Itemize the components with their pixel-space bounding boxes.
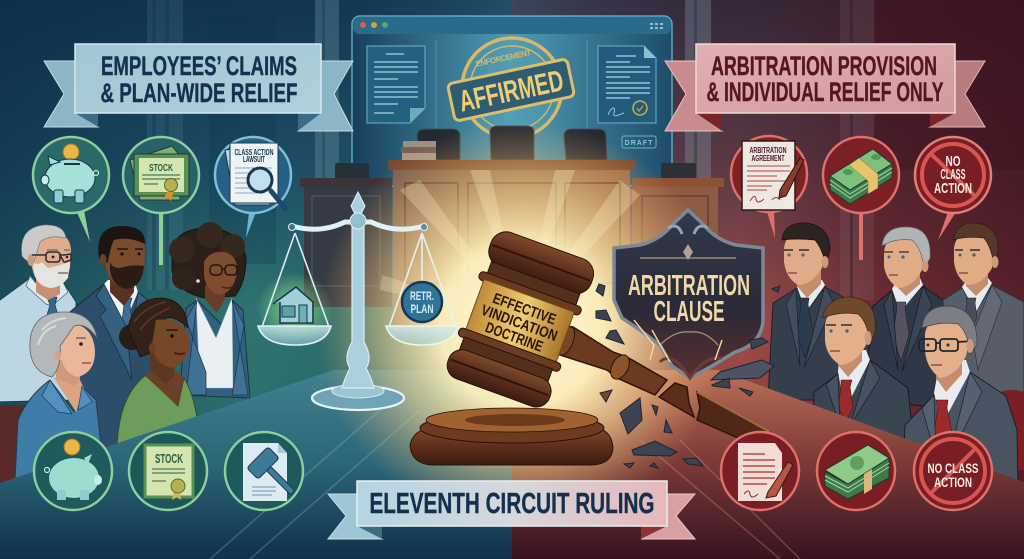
screen document right xyxy=(598,46,656,123)
employee: woman with grey hair xyxy=(14,312,106,500)
stamp: affirmed xyxy=(444,38,575,138)
banner: eleventh circuit ruling xyxy=(328,481,695,539)
icon bubble: stock certificate top: STOCK xyxy=(149,163,174,174)
icon: retirement plan badge: PLAN xyxy=(410,302,434,316)
icon bubble: arbitration agreement: AGREEMENT xyxy=(752,154,785,163)
stamp: affirmed: AFFIRMED xyxy=(456,64,567,119)
gavel band text: VINDICATION xyxy=(479,302,560,345)
shattered arbitration clause shield xyxy=(614,210,763,378)
balance scales xyxy=(257,192,458,410)
books xyxy=(401,141,436,160)
banner: employees' claims: & PLAN-WIDE RELIEF xyxy=(100,78,298,108)
icon bubble: piggy bank top xyxy=(33,137,109,242)
employee: older man with glasses xyxy=(0,225,78,402)
icon badge: cash stack bottom xyxy=(817,432,895,510)
banner: arbitration provision xyxy=(665,44,985,131)
icon bubble: arbitration agreement: ARBITRATION xyxy=(750,146,787,155)
icon badge: piggy bank bottom xyxy=(34,432,112,510)
red chair xyxy=(1000,390,1024,470)
icon badge: no class action bottom xyxy=(914,432,992,510)
icon bubble: no class action xyxy=(915,137,991,240)
icon badge: stock certificate bottom xyxy=(129,432,207,510)
scale base and post xyxy=(312,192,404,410)
icon badge: gavel document xyxy=(225,432,303,510)
icon bubble: stock certificate top xyxy=(123,137,199,265)
icon bubble: cash stack top xyxy=(823,137,899,260)
employee: man in blue suit xyxy=(70,226,166,452)
icon bubble: no class action: NO xyxy=(946,153,961,170)
table xyxy=(0,370,1024,559)
shield shards xyxy=(596,284,780,468)
banner: employees' claims xyxy=(44,44,353,131)
icon badge: no class action bottom: ACTION xyxy=(934,474,972,490)
judges' bench with chairs and books xyxy=(300,126,724,329)
right pan with retirement plan xyxy=(386,233,458,345)
sound block xyxy=(410,408,613,465)
gavel handle broken part xyxy=(659,383,770,441)
icon: retirement plan badge xyxy=(402,282,442,322)
shield title: CLAUSE xyxy=(654,296,724,328)
chairs xyxy=(417,126,607,160)
gavel handle upper part xyxy=(554,324,667,395)
icon bubble: no class action: ACTION xyxy=(934,180,972,197)
gavel xyxy=(443,227,770,441)
gavel head xyxy=(443,227,598,411)
shield title: ARBITRATION xyxy=(628,270,750,302)
icon bubble: no class action: CLASS xyxy=(940,166,966,183)
icon bubble: class action lawsuit: CLASS ACTION xyxy=(234,148,274,157)
icon bubble: arbitration agreement xyxy=(731,136,807,238)
banner: employees' claims: EMPLOYEES’ CLAIMS xyxy=(101,51,297,81)
gavel band text: EFFECTIVE xyxy=(490,290,558,329)
employee: woman with curly hair xyxy=(169,222,250,398)
attorney: brown hair right xyxy=(943,223,1024,420)
left pan with house xyxy=(257,233,333,348)
chair behind woman xyxy=(0,405,30,485)
icon badge: stock certificate bottom: STOCK xyxy=(155,451,183,466)
screen: affirmed decision display xyxy=(352,16,672,186)
screen document left xyxy=(367,46,425,123)
stamp: affirmed: ENFORCEMENT xyxy=(475,48,534,69)
button: draft xyxy=(622,136,656,148)
gavel band text xyxy=(474,288,565,359)
gavel band text: DOCTRINE xyxy=(483,319,545,356)
attorney: top left xyxy=(768,223,870,400)
left group: employees xyxy=(0,222,250,500)
central light burst xyxy=(317,120,727,530)
icon bubble: class action lawsuit xyxy=(215,137,291,238)
attorney: grey haired xyxy=(865,227,962,410)
right group: attorneys xyxy=(768,223,1024,495)
attorney: front with red tie xyxy=(812,297,914,450)
icon badge: no class action bottom: NO CLASS xyxy=(928,460,978,476)
shield title xyxy=(628,270,750,328)
banner: eleventh circuit ruling: ELEVENTH CIRCUIT RULING xyxy=(370,488,654,520)
button: draft: DRAFT xyxy=(625,140,653,147)
attorney: front with glasses xyxy=(902,306,1018,495)
icon badge: agreement with pen xyxy=(721,432,799,510)
icon: house xyxy=(273,287,313,323)
icon bubble: class action lawsuit: LAWSUIT xyxy=(243,155,265,164)
icon: retirement plan badge: RETR. xyxy=(410,289,434,303)
employee: woman in green xyxy=(117,298,200,450)
scale beam xyxy=(288,213,428,230)
